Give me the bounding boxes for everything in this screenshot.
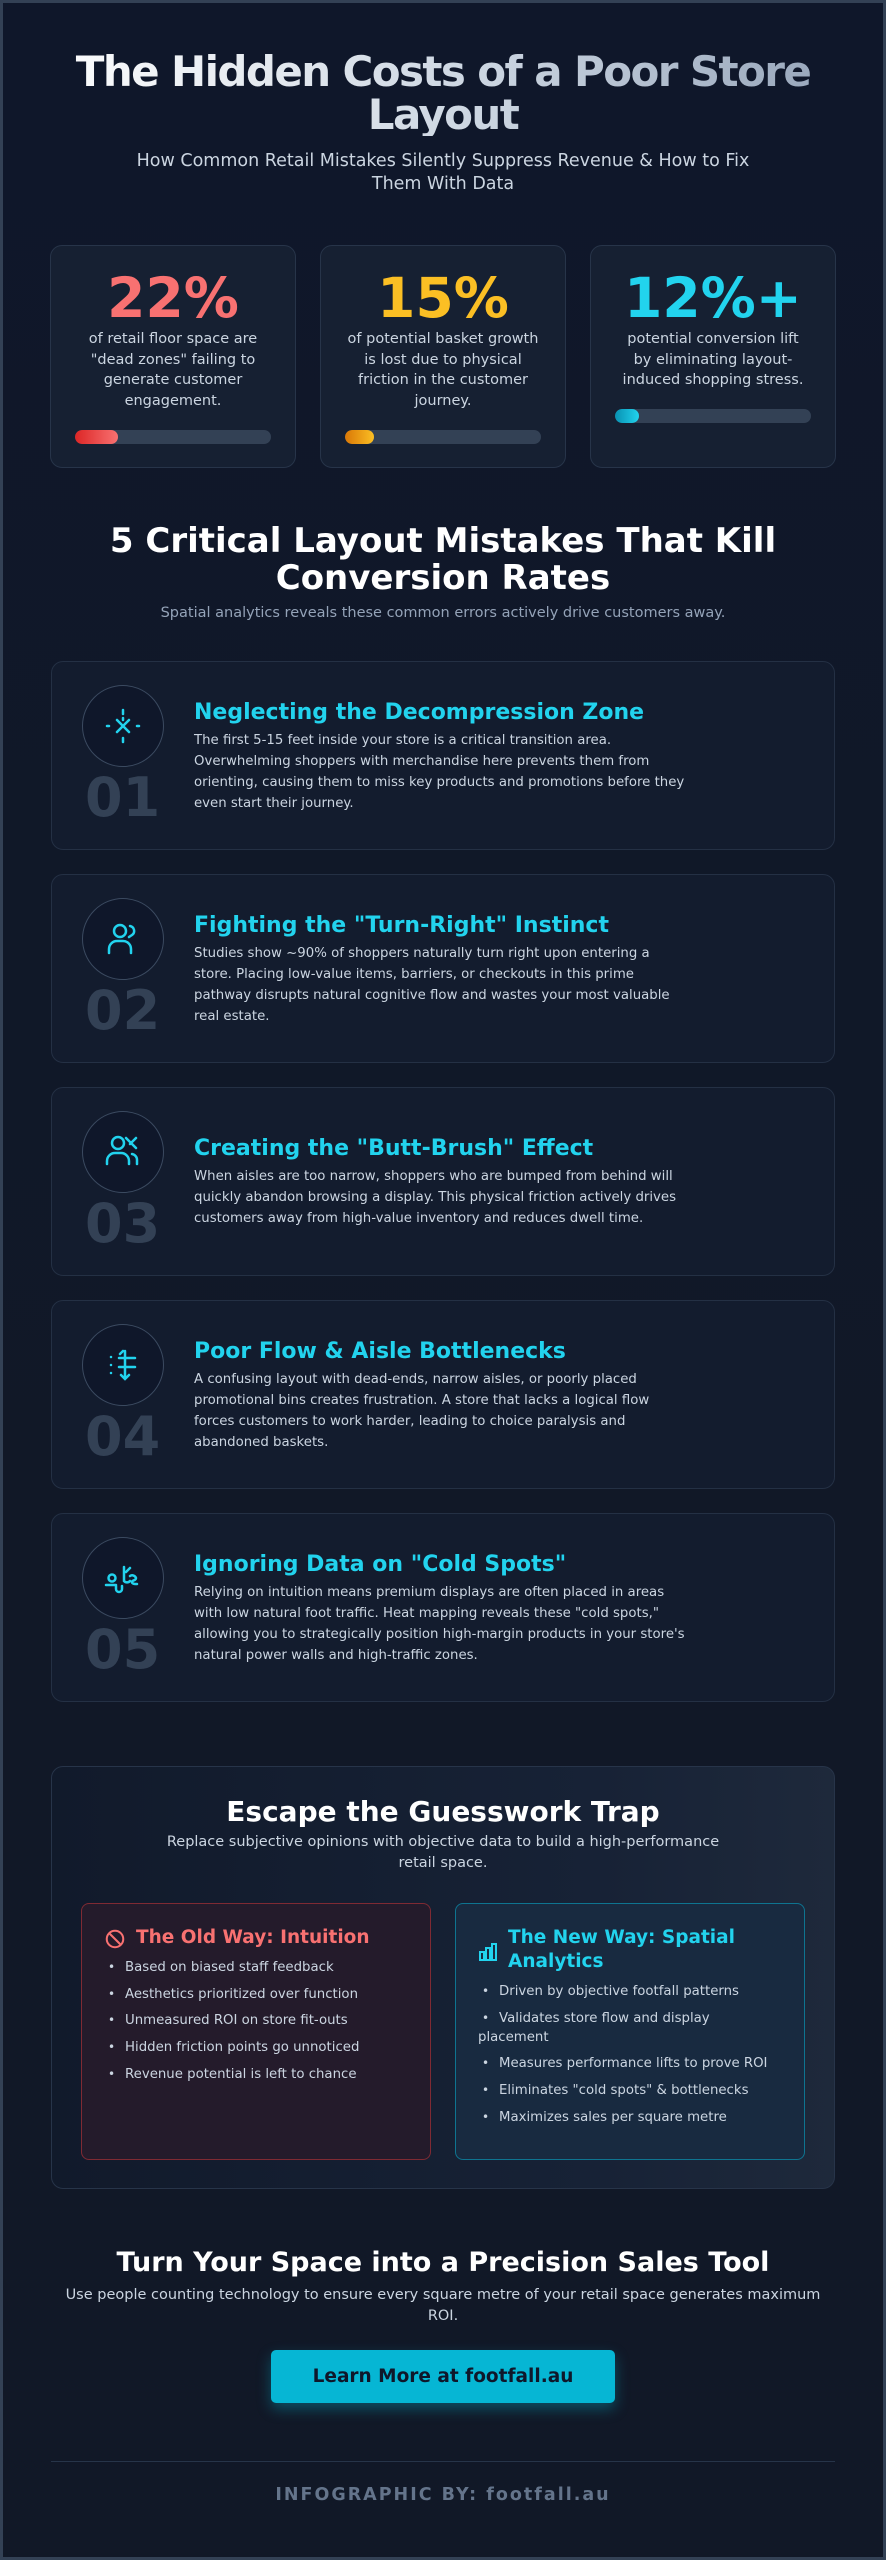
- icon: person turning: [82, 898, 164, 980]
- text block: Studies show ~90% of shoppers naturally turn right upon entering a store. Placing low-value items, barriers, or checkouts in this prime pathway disrupts natural cognitive flow and wastes your most valuable real estate.: [194, 946, 670, 1024]
- old way list: Revenue potential is left to chance: [125, 2067, 357, 2082]
- number 02: 02: [85, 979, 160, 1042]
- stat card: 12%+: [590, 245, 836, 468]
- box heading with ban icon: The Old Way: Intuition: [136, 1927, 370, 1948]
- old way list: Unmeasured ROI on store fit-outs: [125, 2013, 348, 2028]
- subtitle: How Common Retail Mistakes Silently Suppress Revenue & How to Fix Them With Data: [137, 151, 749, 194]
- new way list: Eliminates "cold spots" & bottlenecks: [499, 2083, 748, 2098]
- stat number: 15%: [377, 266, 509, 330]
- card: mistake 05: [51, 1513, 835, 1702]
- number 05: 05: [85, 1618, 160, 1681]
- icon: flow list: [82, 1324, 164, 1406]
- new way list: Driven by objective footfall patterns: [499, 1984, 739, 1999]
- progress bar: [345, 430, 541, 444]
- stat description: potential conversion lift by eliminating layout-induced shopping stress.: [623, 331, 803, 388]
- box heading with chart icon: The New Way: Spatial Analytics: [508, 1927, 735, 1972]
- card: mistake 01: [51, 661, 835, 850]
- title: The Hidden Costs of a Poor Store Layout: [76, 47, 810, 139]
- text block: Relying on intuition means premium displays are often placed in areas with low natural foot traffic. Heat mapping reveals these "cold spots," allowing you to strategically position high-margin products in your store's natural power walls and high-traffic zones.: [194, 1584, 685, 1662]
- text block: The first 5-15 feet inside your store is a critical transition area. Overwhelming shoppers with merchandise here prevents them from orienting, causing them to miss key products and promotions before they even start their journey.: [194, 732, 684, 810]
- card: mistake 02: [51, 874, 835, 1063]
- number 03: 03: [85, 1192, 160, 1255]
- footer credit: INFOGRAPHIC BY: footfall.au: [275, 2485, 611, 2505]
- text block: When aisles are too narrow, shoppers who are bumped from behind will quickly abandon browsing a display. This physical friction actively drives customers away from high-value inventory and reduces dwell time.: [194, 1169, 676, 1226]
- box: old way: [81, 1903, 431, 2160]
- card: mistake 03: [51, 1087, 835, 1276]
- new way list: Measures performance lifts to prove ROI: [499, 2056, 767, 2071]
- old way list: Based on biased staff feedback: [125, 1960, 334, 1975]
- CTA subtitle: Use people counting technology to ensure every square metre of your retail space generates maximum ROI.: [66, 2287, 820, 2324]
- panel: escape the guesswork: [51, 1766, 835, 2189]
- stat number: 22%: [107, 266, 239, 330]
- panel subtitle: Replace subjective opinions with objective data to build a high-performance retail space.: [167, 1834, 719, 1871]
- text block: Ignoring Data on "Cold Spots": [194, 1552, 566, 1576]
- new way list: [478, 1984, 767, 2125]
- progress bar: [75, 430, 271, 444]
- text block: Neglecting the Decompression Zone: [194, 700, 644, 724]
- text block: Poor Flow & Aisle Bottlenecks: [194, 1338, 566, 1364]
- CTA heading: Turn Your Space into a Precision Sales Tool: [117, 2247, 769, 2278]
- stat number: 12%+: [624, 266, 802, 330]
- stat card: 22%: [50, 245, 296, 468]
- number 04: 04: [85, 1405, 160, 1468]
- old way list: Hidden friction points go unnoticed: [125, 2040, 359, 2055]
- panel heading: Escape the Guesswork Trap: [226, 1795, 660, 1828]
- section subtitle: Spatial analytics reveals these common errors actively drive customers away.: [161, 605, 725, 621]
- section heading: mistakes: 5 Critical Layout Mistakes That Kill Conversion Rates: [110, 521, 776, 598]
- number 01: 01: [85, 766, 160, 829]
- box: new way: [455, 1903, 805, 2160]
- new way list: Maximizes sales per square metre: [499, 2110, 727, 2125]
- new way list: Validates store flow and display placement: [478, 2011, 710, 2045]
- icon: crowded people: [82, 1111, 164, 1193]
- CTA button: Learn More at footfall.au: [313, 2366, 573, 2387]
- text block: A confusing layout with dead-ends, narrow aisles, or poorly placed promotional bins creates frustration. A store that lacks a logical flow forces customers to work harder, leading to choice paralysis and abandoned baskets.: [194, 1372, 649, 1450]
- stat description: of potential basket growth is lost due to physical friction in the customer journey.: [348, 331, 538, 409]
- card: mistake 04: [51, 1300, 835, 1489]
- text block: Fighting the "Turn-Right" Instinct: [194, 912, 609, 938]
- old way list: Aesthetics prioritized over function: [125, 1987, 358, 2002]
- icon: cold spots: [82, 1537, 164, 1619]
- progress bar: [615, 409, 811, 423]
- stat description: of retail floor space are "dead zones" failing to generate customer engagement.: [89, 331, 257, 409]
- text block: [194, 1136, 676, 1226]
- stat card: 15%: [320, 245, 566, 468]
- CTA button: [271, 2350, 615, 2403]
- old way list: [110, 1960, 359, 2082]
- icon: decompression burst: [82, 685, 164, 767]
- text block: Creating the "Butt-Brush" Effect: [194, 1136, 593, 1161]
